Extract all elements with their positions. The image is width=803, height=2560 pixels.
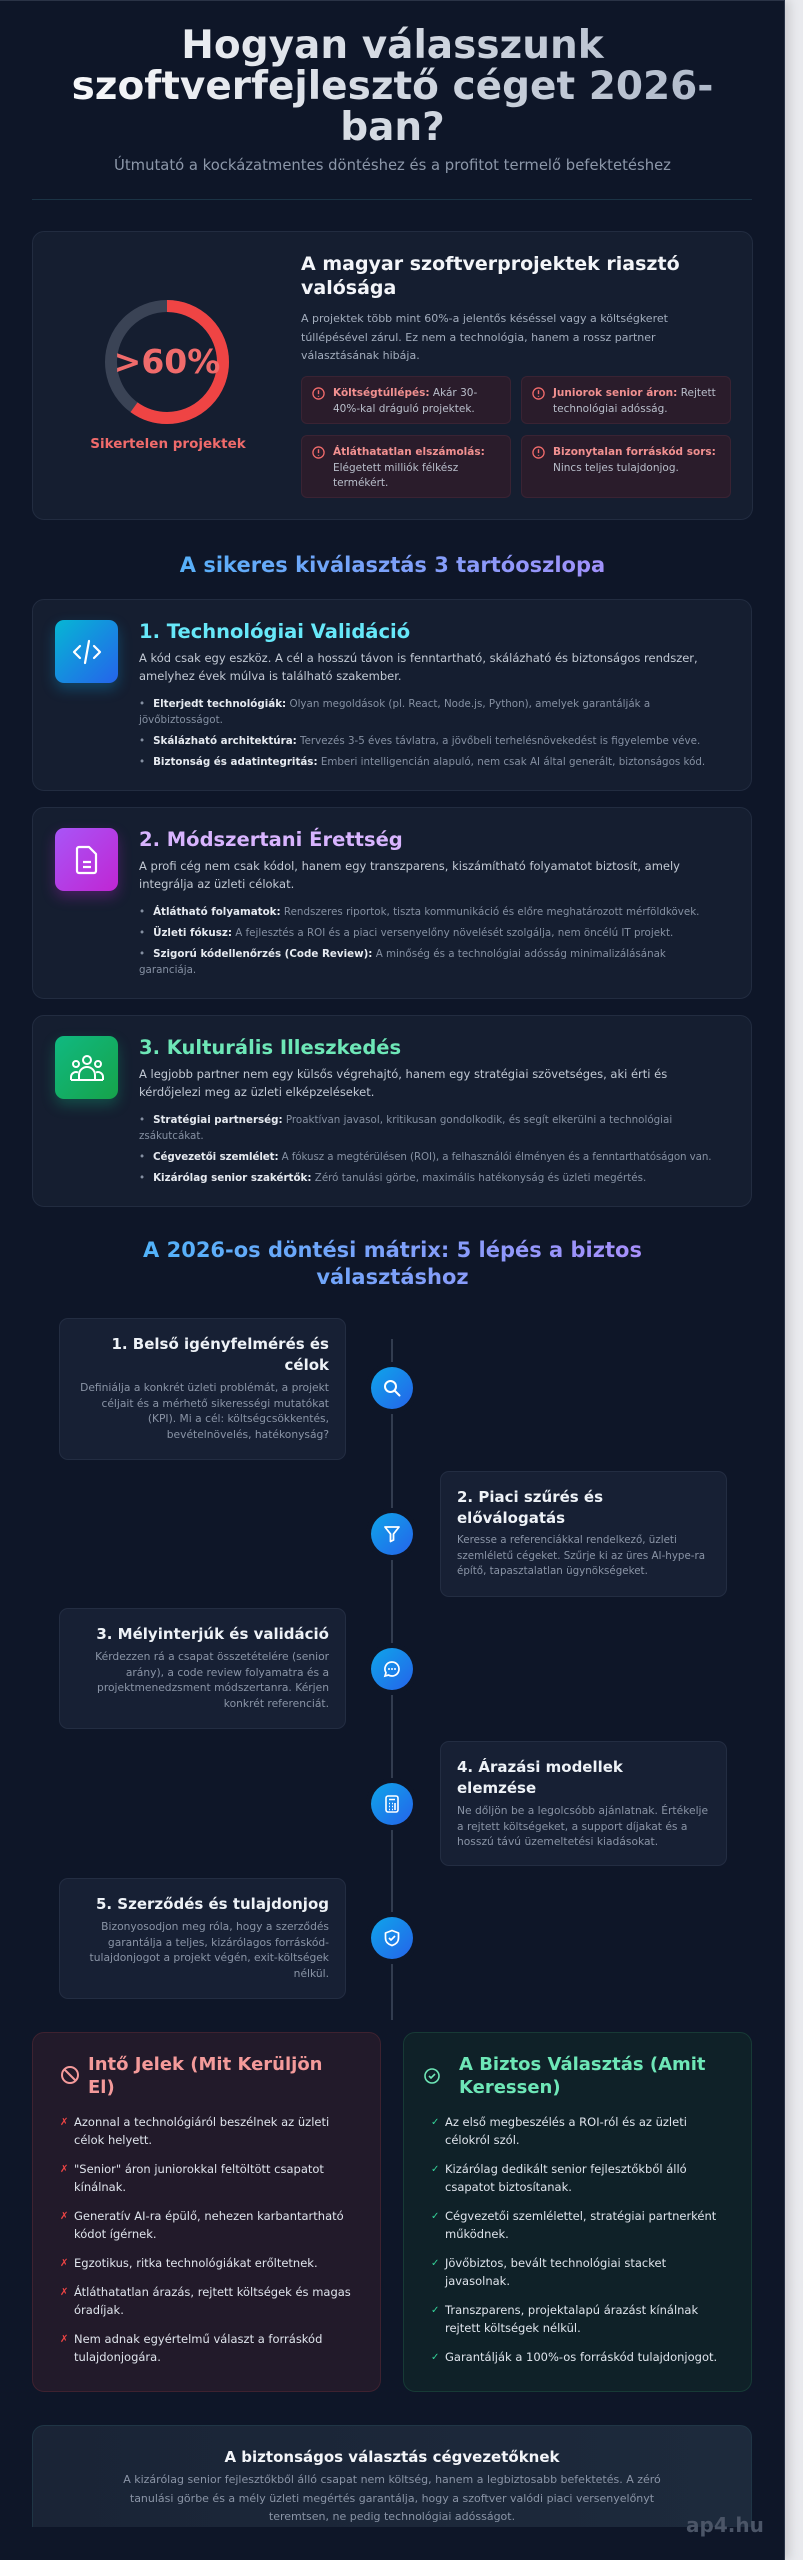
panel: warning signs: Egzotikus, ritka technológiákat erőltetnek.	[74, 2256, 318, 2270]
panel: safe choice: Transzparens, projektalapú árazást kínálnak rejtett költségek nélkül.	[445, 2303, 698, 2335]
alert: source code: Bizonytalan forráskód sors: Nincs teljes tulajdonjog.	[553, 446, 716, 474]
icon: document	[55, 828, 118, 891]
alert: cost: 40%-kal dráguló projektek.	[333, 402, 475, 414]
panel: pillar 2: Szigorú kódellenőrzés (Code Review): A minőség és a technológiai adósság minimalizálásának	[153, 948, 666, 960]
panel: safe choice: Garantálják a 100%-os forráskód tulajdonjogot.	[445, 2350, 717, 2364]
step 4: elemzése	[457, 1779, 536, 1797]
alert: cost: Költségtúllépés: Akár 30-	[333, 387, 477, 399]
panel: warning signs: Generatív AI-ra épülő, nehezen karbantartható kódot ígérnek.	[74, 2209, 344, 2241]
icon: calculator	[371, 1783, 413, 1825]
title: ban?	[340, 105, 445, 150]
panel: warning signs: ✗	[60, 2287, 68, 2298]
panel: safe choice	[403, 2032, 752, 2392]
panel: warning signs: "Senior" áron juniorokkal feltöltött csapatot kínálnak.	[74, 2162, 324, 2194]
step 2: szemléletű cégeket. Szűrje ki az üres AI-hype-ra	[457, 1550, 705, 1562]
icon: shield	[371, 1917, 413, 1959]
panel: safe choice: ✓	[431, 2117, 439, 2128]
title: Hogyan válasszunk	[181, 23, 604, 68]
panel: pillar 2: A profi cég nem csak kódol, hanem egy transzparens, kiszámítható folyamatot biztosít, amely	[139, 859, 680, 873]
panel: warning signs: Azonnal a technológiáról beszélnek az üzleti célok helyett.	[74, 2115, 329, 2147]
panel: pillar 3: kérdőjelezi meg az üzleti elképzeléseket.	[139, 1085, 374, 1099]
panel: pillar 1	[32, 599, 752, 791]
panel: pillar 3: Cégvezetői szemlélet: A fókusz a megtérülésen (ROI), a felhasználói élményen és a fenntarthatóságon van.	[153, 1151, 711, 1163]
panel: pillar 3: Stratégiai partnerség: Proaktívan javasol, kritikusan gondolkodik, és segít elkerülni a technológiai	[153, 1114, 672, 1126]
step 1	[59, 1318, 346, 1460]
stats heading: A magyar szoftverprojektek riasztó valósága	[301, 253, 680, 299]
icon: chat	[371, 1648, 413, 1690]
footer callout: A kizárólag senior fejlesztőkből álló csapat nem költség, hanem a legbiztosabb befektetés. A zéró	[123, 2473, 661, 2486]
step 1: célok	[284, 1356, 329, 1374]
alert: billing: Átláthatatlan elszámolás: Elégetett milliók félkész termékért.	[333, 446, 485, 489]
panel: pillar 3: Kizárólag senior szakértők: Zéró tanulási görbe, maximális hatékonyság és üzleti megértés.	[153, 1172, 646, 1184]
panel: warning signs: El)	[88, 2077, 115, 2098]
footer callout: tanulási görbe és a mély üzleti megértés garantálja, hogy a szoftver valódi piaci versenyelőnyt	[130, 2492, 654, 2504]
heading: pillars: A sikeres kiválasztás 3 tartóoszlopa	[180, 553, 605, 577]
stats text: A projektek több mint 60%-a jelentős késéssel vagy a költségkeret túllépésével zárul. Ez nem a technológia, hanem a rossz partner választásának hibája.	[301, 312, 668, 362]
footer callout: A biztonságos választás cégvezetőknek	[224, 2448, 560, 2466]
panel: warning signs: Átláthatatlan árazás, rejtett költségek és magas óradíjak.	[74, 2285, 351, 2317]
panel: safe choice: Az első megbeszélés a ROI-ról és az üzleti célokról szól.	[445, 2115, 687, 2147]
step 2: előválogatás	[457, 1509, 565, 1527]
panel: pillar 2: integrálja az üzleti célokat.	[139, 877, 294, 891]
panel: safe choice: Jövőbiztos, bevált technológiai stacket javasolnak.	[445, 2256, 666, 2288]
step 4: Ne dőljön be a legolcsóbb ajánlatnak. Értékelje a rejtett költségeket, a support díjakat és a hosszú távú üzemeltetési kiadásokat.	[457, 1804, 708, 1848]
step 2: 2. Piaci szűrés és	[457, 1488, 603, 1506]
title: szoftverfejlesztő céget 2026-	[72, 64, 713, 109]
panel: warning signs: ✗	[60, 2211, 68, 2222]
subtitle: Útmutató a kockázatmentes döntéshez és a profitot termelő befektetéshez	[114, 157, 671, 174]
panel: safe choice: ✓	[431, 2211, 439, 2222]
panel: warning signs: Intő Jelek (Mit Kerüljön	[88, 2054, 323, 2075]
panel: warning signs	[32, 2032, 381, 2392]
donut chart	[105, 300, 229, 424]
heading: decision matrix: választáshoz	[316, 1265, 469, 1289]
step 2: Keresse a referenciákkal rendelkező, üzleti	[457, 1534, 677, 1546]
panel: pillar 2: Átlátható folyamatok: Rendszeres riportok, tiszta kommunikáció és előre meghatározott mérföldkövek.	[153, 906, 699, 918]
panel: pillar 2	[32, 807, 752, 999]
donut label: Sikertelen projektek	[90, 436, 246, 452]
panel: warning signs: ✗	[60, 2334, 68, 2345]
panel: pillar 1: A kód csak egy eszköz. A cél a hosszú távon is fenntartható, skálázható és biztonságos rendszer, amelyhez évek múlva is található szakember.	[139, 651, 698, 683]
panel: pillar 1: Biztonság és adatintegritás: Emberi intelligencián alapuló, nem csak AI által generált, biztonságos kód.	[153, 756, 705, 768]
heading: decision matrix	[0, 1237, 785, 1291]
panel: pillar 1: Elterjedt technológiák: Olyan megoldások (pl. React, Node.js, Python), amelyek garantálják a jövőbiztosságot.	[139, 698, 650, 726]
step 3	[59, 1608, 346, 1729]
step 1: Definiálja a konkrét üzleti problémát, a projekt céljait és a mérhető sikerességi mutatókat (KPI). Mi a cél: költségcsökkentés, bevételnövelés, hatékonyság?	[80, 1381, 329, 1441]
panel: pillar 1: Skálázható architektúra: Tervezés 3-5 éves távlatra, a jövőbeli terhelésnövekedést is figyelembe véve.	[153, 735, 700, 747]
icon: filter	[371, 1513, 413, 1555]
step 5	[59, 1878, 346, 1999]
panel: pillar 2: garanciája.	[139, 964, 196, 976]
panel: warning signs: Nem adnak egyértelmű választ a forráskód tulajdonjogára.	[74, 2332, 322, 2364]
panel: warning signs: ✗	[60, 2258, 68, 2269]
step 4	[440, 1741, 727, 1866]
step 1: 1. Belső igényfelmérés és	[111, 1335, 329, 1353]
alert: juniors	[521, 376, 731, 424]
icon: code	[55, 620, 118, 683]
alert: juniors: Juniorok senior áron: Rejtett technológiai adósság.	[553, 387, 716, 414]
panel: pillar 3: 3. Kulturális Illeszkedés	[139, 1036, 401, 1059]
icon: search	[371, 1367, 413, 1409]
alert: billing	[301, 435, 511, 498]
panel: warning signs: ✗	[60, 2164, 68, 2175]
step 4: 4. Árazási modellek	[457, 1758, 623, 1776]
step 3: Kérdezzen rá a csapat összetételére (senior arány), a code review folyamatra és a projektmenedzsment módszertanra. Kérjen konkrét referenciát.	[95, 1650, 329, 1710]
panel: safe choice: ✓	[431, 2352, 439, 2363]
panel: pillar 3: A legjobb partner nem egy külsős végrehajtó, hanem egy stratégiai szövetséges, aki érti és	[139, 1067, 667, 1081]
panel: stats	[32, 231, 753, 520]
alert: cost	[301, 376, 511, 424]
heading: decision matrix: A 2026-os döntési mátrix: 5 lépés a biztos	[143, 1238, 642, 1262]
step 2: építő, tapasztalatlan ügynökségeket.	[457, 1565, 648, 1577]
panel: pillar 2: Üzleti fókusz: A fejlesztés a ROI és a piaci versenyelőny növelését szolgálja, nem öncélú IT projekt.	[153, 927, 673, 939]
step 2	[440, 1471, 727, 1597]
panel: safe choice: Cégvezetői szemlélettel, stratégiai partnerként működnek.	[445, 2209, 716, 2241]
footer callout: teremtsen, ne pedig technológiai adósságot.	[269, 2510, 515, 2523]
panel: pillar 3: zsákutcákat.	[139, 1130, 204, 1142]
alert: source code	[521, 435, 731, 498]
title	[0, 25, 785, 148]
step 5: Bizonyosodjon meg róla, hogy a szerződés garantálja a teljes, kizárólagos forráskód-tulajdonjogot a projekt végén, exit-költségek nélkül.	[90, 1920, 329, 1980]
heading: pillars	[0, 552, 785, 579]
step 3: 3. Mélyinterjúk és validáció	[96, 1625, 329, 1643]
donut chart: >60%	[114, 342, 220, 381]
panel: safe choice: ✓	[431, 2305, 439, 2316]
watermark: ap4.hu	[686, 2513, 764, 2537]
panel: safe choice: Kizárólag dedikált senior fejlesztőkből álló csapatot biztosítanak.	[445, 2162, 687, 2194]
panel: pillar 3	[32, 1015, 752, 1207]
panel: warning signs: ✗	[60, 2117, 68, 2128]
panel: safe choice: ✓	[431, 2164, 439, 2175]
panel: pillar 2: 2. Módszertani Érettség	[139, 828, 403, 851]
panel: safe choice: ✓	[431, 2258, 439, 2269]
panel: safe choice: Keressen)	[459, 2077, 561, 2098]
icon: people	[55, 1036, 118, 1099]
panel: safe choice: A Biztos Választás (Amit	[459, 2054, 706, 2075]
panel: pillar 1: 1. Technológiai Validáció	[139, 620, 410, 643]
step 5: 5. Szerződés és tulajdonjog	[96, 1895, 329, 1913]
footer callout	[32, 2425, 752, 2527]
